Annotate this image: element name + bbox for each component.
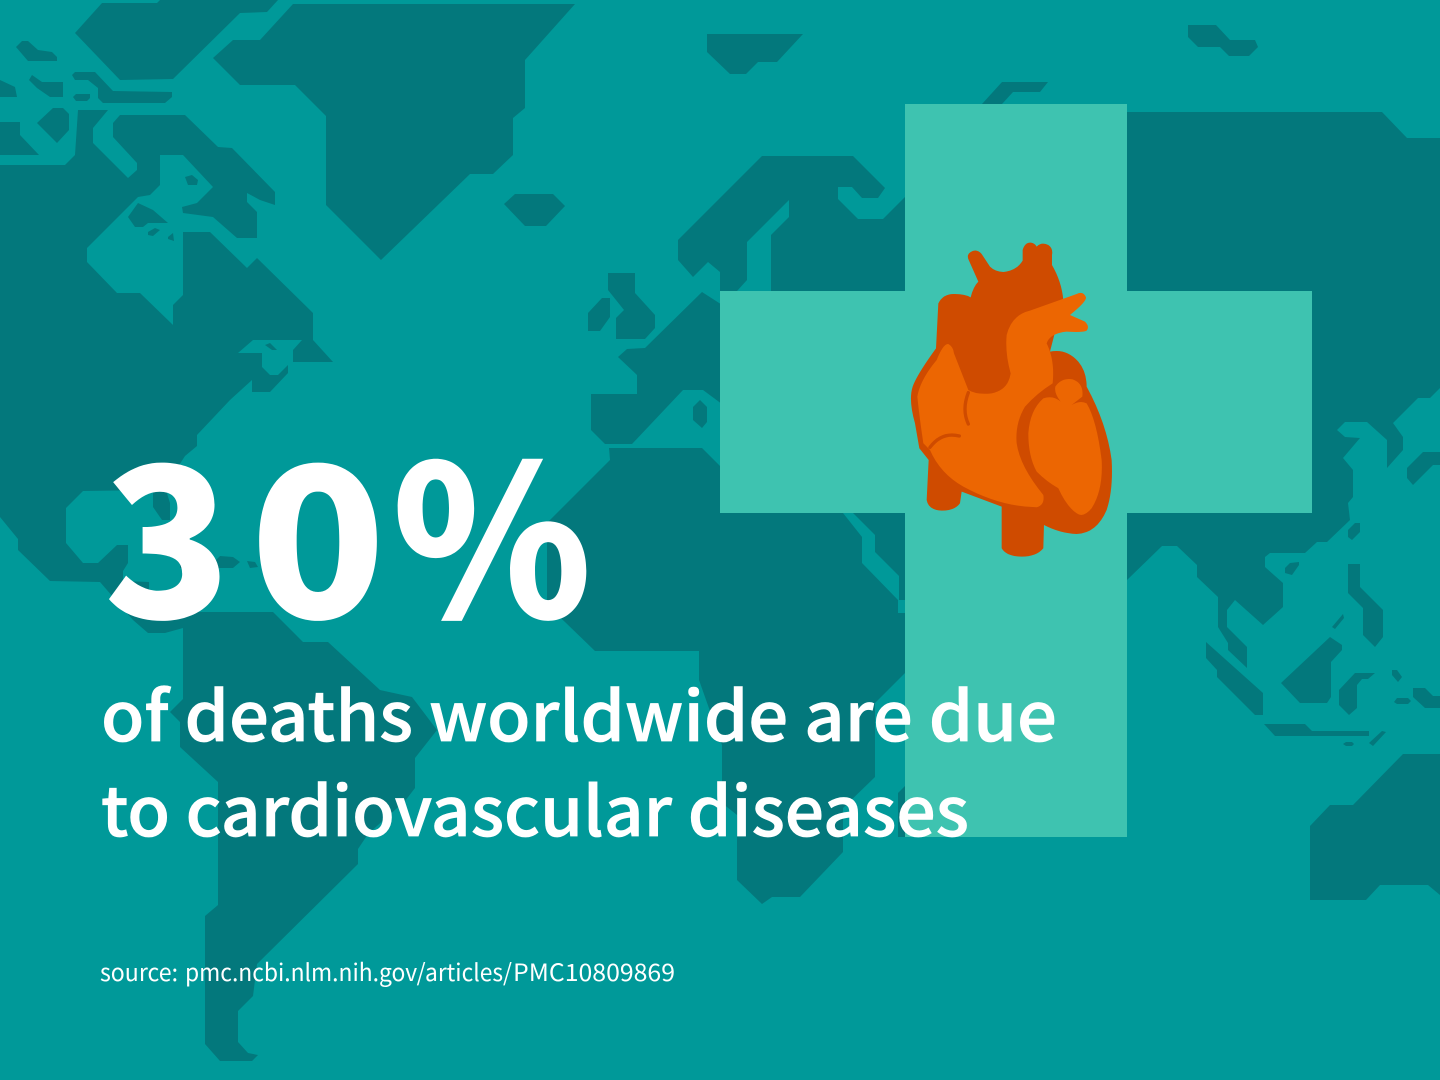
subtitle line two: to cardiovascular diseases bbox=[101, 757, 969, 856]
Red Sea bbox=[843, 513, 905, 613]
source note: PMC10809869 bbox=[513, 953, 675, 988]
headline stat: 30%: % bbox=[392, 375, 592, 679]
subtitle text bbox=[101, 662, 1057, 856]
source note: pmc.ncbi.nlm.nih.gov/articles/ bbox=[185, 953, 513, 988]
Scandinavia bbox=[678, 156, 905, 291]
headline stat: 30%: 3 bbox=[104, 375, 231, 679]
continental Europe bbox=[591, 292, 730, 444]
Greenland bbox=[213, 4, 575, 260]
Madagascar bbox=[898, 783, 930, 837]
heart bright body and artery bbox=[917, 293, 1088, 507]
British Isles bbox=[588, 273, 655, 339]
Iceland bbox=[504, 194, 565, 226]
Russia and Asia bbox=[1000, 112, 1440, 668]
Africa bbox=[547, 448, 905, 904]
Hudson Bay and Caribbean islands bbox=[128, 175, 277, 568]
Svalbard bbox=[707, 34, 803, 74]
arctic islands, North America bbox=[0, 0, 278, 155]
icon: anatomical heart bbox=[911, 243, 1112, 557]
heart left ventricle bbox=[1028, 379, 1102, 515]
subtitle line one: of deaths worldwide are due bbox=[101, 662, 1057, 761]
Australia bbox=[1310, 754, 1440, 900]
heart vessel lines bbox=[930, 393, 968, 447]
headline stat: 30% bbox=[104, 375, 592, 679]
headline stat: 30%: 0 bbox=[250, 375, 386, 679]
source note bbox=[100, 953, 675, 988]
Asian and Pacific islands bbox=[982, 25, 1440, 746]
heart dark outer silhouette bbox=[911, 243, 1112, 557]
medical cross bbox=[720, 104, 1312, 837]
source note: source: bbox=[100, 953, 178, 988]
North and South America bbox=[0, 110, 437, 1061]
